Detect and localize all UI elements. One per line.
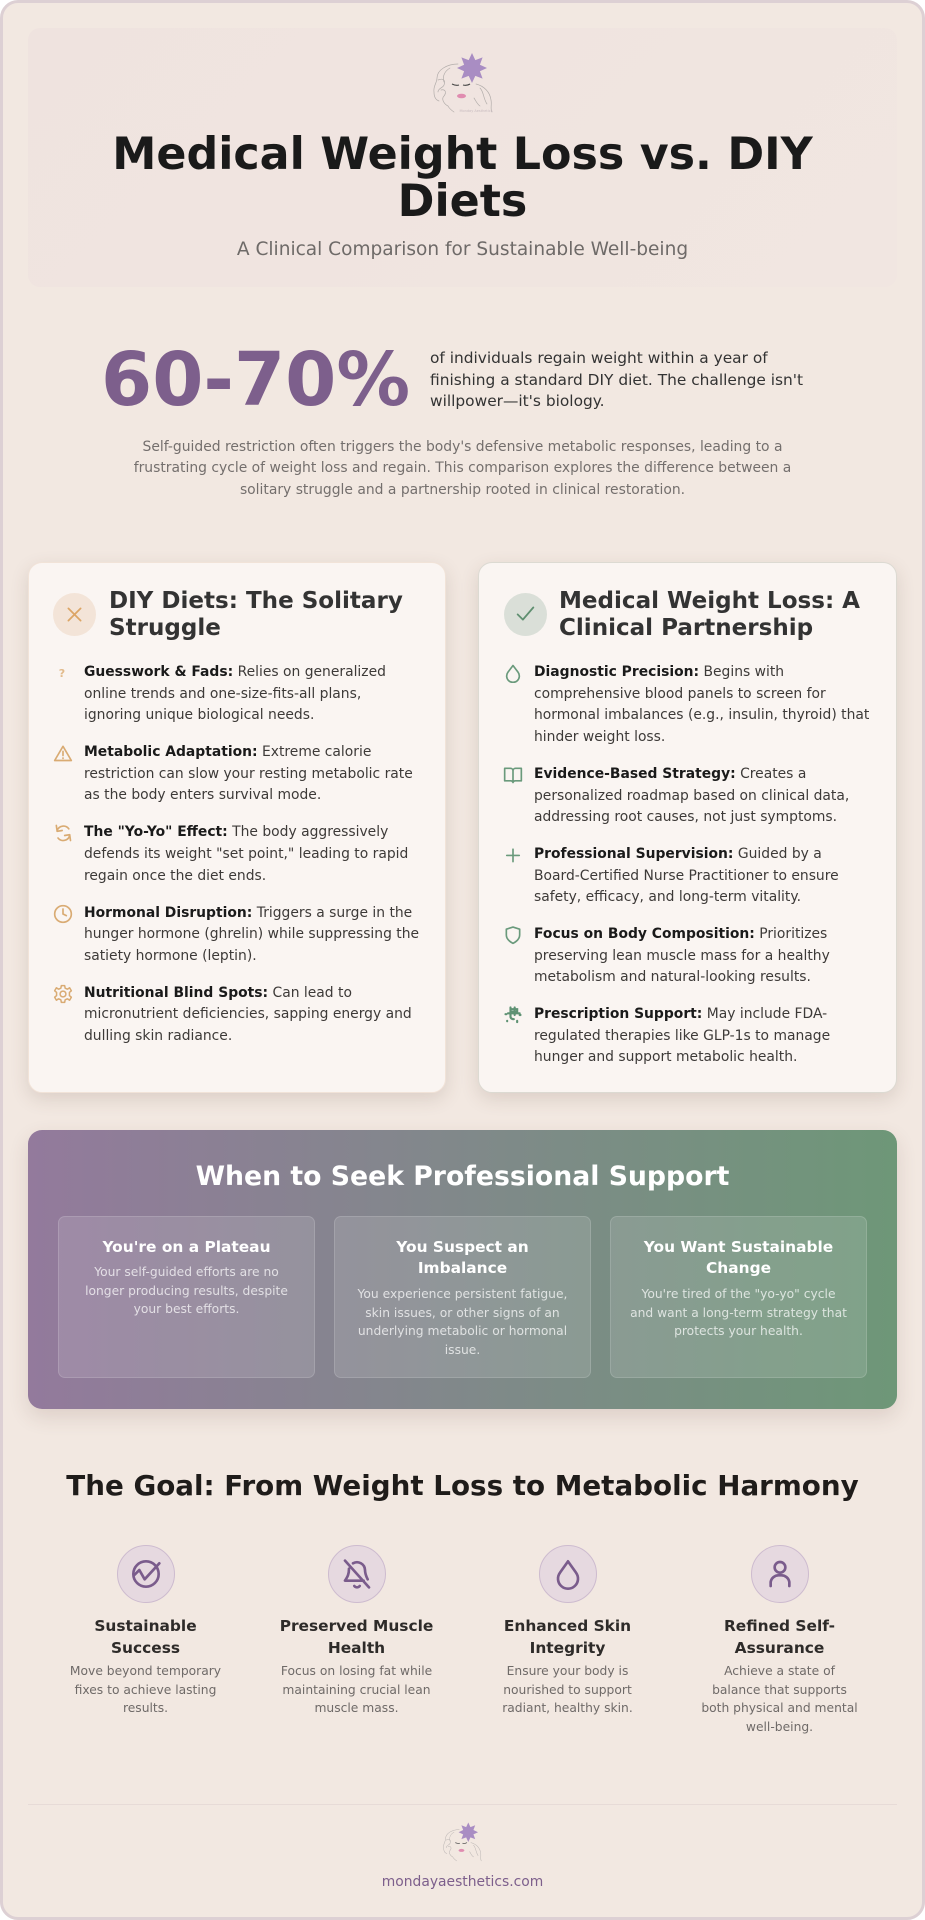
item: guesswork xyxy=(59,664,386,723)
goal: refined self-assurance: Assurance xyxy=(735,1639,824,1657)
item: body composition: Focus on Body Composition: Prioritizes xyxy=(534,926,827,942)
item: yo-yo effect: The "Yo-Yo" Effect: The body aggressively xyxy=(84,824,388,840)
goal: refined self-assurance: Refined Self- xyxy=(724,1617,835,1635)
item: guesswork: Guesswork & Fads: Relies on generalized xyxy=(84,664,386,680)
intro paragraph: solitary struggle and a partnership rooted in clinical restoration. xyxy=(240,482,685,498)
item: guesswork: ? xyxy=(59,667,65,680)
card: plateau: You're on a Plateau xyxy=(102,1238,271,1256)
card: plateau: your best efforts. xyxy=(134,1302,239,1316)
item: evidence-based strategy: personalized roadmap based on clinical data, xyxy=(534,788,849,804)
text: results. xyxy=(123,1701,168,1715)
item: yo-yo effect: regain once the diet ends. xyxy=(84,868,266,884)
item: metabolic adaptation: restriction can slow your resting metabolic rate xyxy=(84,766,413,782)
item: hormonal disruption: hunger hormone (ghrelin) while suppressing the xyxy=(84,926,419,942)
intro paragraph: frustrating cycle of weight loss and regain. This comparison explores the difference between a xyxy=(134,460,791,476)
item: metabolic adaptation: Metabolic Adaptation: Extreme calorie xyxy=(84,744,371,760)
text: both physical and mental xyxy=(701,1701,858,1715)
header panel xyxy=(28,28,897,287)
heading xyxy=(559,588,860,641)
item: hormonal disruption: Hormonal Disruption: Triggers a surge in the xyxy=(84,905,412,921)
card: imbalance: skin issues, or other signs of an xyxy=(365,1306,560,1320)
goal: enhanced skin integrity: Integrity xyxy=(530,1639,605,1657)
stat description: willpower—it's biology. xyxy=(430,392,605,410)
footer logo xyxy=(443,1822,482,1861)
item: prescription support: hunger and support metabolic health. xyxy=(534,1049,797,1065)
item: body composition: metabolism and natural-looking results. xyxy=(534,969,811,985)
item: professional supervision: Professional Supervision: Guided by a xyxy=(534,846,822,862)
icon: bell off xyxy=(328,1545,386,1603)
card: sustainable change: You Want Sustainable xyxy=(644,1238,833,1256)
goal: preserved muscle health xyxy=(280,1545,433,1715)
panel: when to seek professional support xyxy=(28,1130,897,1409)
icon: droplet xyxy=(538,1545,596,1603)
goal: enhanced skin integrity xyxy=(502,1545,633,1715)
icon: chart in circle xyxy=(116,1545,174,1603)
subtitle: A Clinical Comparison for Sustainable Well-being xyxy=(237,239,688,260)
logo: Monday Aesthetics xyxy=(459,109,493,113)
card: plateau: Your self-guided efforts are no xyxy=(94,1265,279,1279)
item: yo-yo effect: defends its weight "set point," leading to rapid xyxy=(84,846,408,862)
goal: refined self-assurance xyxy=(701,1545,858,1734)
item: professional supervision: Board-Certified Nurse Practitioner to ensure xyxy=(534,868,839,884)
item: metabolic adaptation: as the body enters survival mode. xyxy=(84,787,321,803)
goal: refined self-assurance: balance that supports xyxy=(712,1682,847,1696)
item: prescription support xyxy=(504,1006,830,1065)
card: sustainable change xyxy=(610,1216,867,1378)
item: nutritional blind spots: Nutritional Blind Spots: Can lead to xyxy=(84,985,352,1001)
card: sustainable change: Change xyxy=(706,1259,771,1277)
goal: sustainable success: Sustainable xyxy=(94,1617,197,1635)
intro paragraph: Self-guided restriction often triggers the body's defensive metabolic responses, leading to a xyxy=(143,438,782,454)
title: Diets xyxy=(398,176,527,227)
item: evidence-based strategy: addressing root causes, not just symptoms. xyxy=(534,809,837,825)
card: imbalance: underlying metabolic or hormonal xyxy=(358,1324,567,1338)
item: diagnostic precision: hormonal imbalances (e.g., insulin, thyroid) that xyxy=(534,707,869,723)
goal: sustainable success: Move beyond temporary xyxy=(70,1664,221,1678)
goal: sustainable success: Success xyxy=(111,1639,180,1657)
item: prescription support: regulated therapies like GLP-1s to manage xyxy=(534,1028,830,1044)
item: metabolic adaptation xyxy=(54,744,413,803)
text: radiant, healthy skin. xyxy=(502,1701,633,1715)
stat description xyxy=(430,349,803,410)
stat description: of individuals regain weight within a year of xyxy=(430,349,768,367)
text: well-being. xyxy=(746,1720,813,1734)
section heading: When to Seek Professional Support xyxy=(196,1161,729,1192)
goal: enhanced skin integrity: Ensure your body is xyxy=(507,1664,628,1678)
item: professional supervision xyxy=(506,846,839,905)
heading: Clinical Partnership xyxy=(559,615,813,641)
item: hormonal disruption: satiety hormone (leptin). xyxy=(84,948,257,964)
item: evidence-based strategy: Evidence-Based Strategy: Creates a xyxy=(534,766,806,782)
card: imbalance: You Suspect an xyxy=(396,1238,529,1256)
footer url: mondayaesthetics.com xyxy=(382,1874,543,1890)
card: plateau xyxy=(58,1216,315,1378)
title xyxy=(112,129,814,227)
item: guesswork: online trends and one-size-fits-all plans, xyxy=(84,686,361,702)
heading: Struggle xyxy=(109,615,221,641)
heading xyxy=(109,588,403,641)
goal heading: The Goal: From Weight Loss to Metabolic Harmony xyxy=(66,1469,859,1502)
item: body composition xyxy=(506,926,830,985)
item: diagnostic precision xyxy=(506,664,869,745)
text: fixes to achieve lasting xyxy=(75,1682,216,1696)
item: prescription support: Prescription Support: May include FDA- xyxy=(534,1006,827,1022)
panel: medical weight loss xyxy=(478,562,897,1093)
text: nourished to support xyxy=(503,1682,632,1696)
card: imbalance: You experience persistent fatigue, xyxy=(358,1287,567,1301)
item: professional supervision: safety, efficacy, and long-term vitality. xyxy=(534,889,801,905)
text: maintaining crucial lean xyxy=(282,1682,431,1696)
card: imbalance: Imbalance xyxy=(418,1259,507,1277)
card: plateau: longer producing results, despite xyxy=(85,1284,288,1298)
item: nutritional blind spots: dulling skin radiance. xyxy=(84,1028,232,1044)
goal: preserved muscle health: Preserved Muscle xyxy=(280,1617,433,1635)
card: sustainable change: and want a long-term strategy that xyxy=(630,1306,847,1320)
text: muscle mass. xyxy=(314,1701,399,1715)
card: sustainable change: You're tired of the "yo-yo" cycle xyxy=(641,1287,836,1301)
icon: person xyxy=(750,1545,808,1603)
intro paragraph xyxy=(134,438,791,498)
goal: refined self-assurance: Achieve a state of xyxy=(724,1664,835,1678)
item: evidence-based strategy xyxy=(504,766,849,825)
item: diagnostic precision: hinder weight loss. xyxy=(534,729,665,745)
logo xyxy=(434,53,493,113)
title: Medical Weight Loss vs. DIY xyxy=(112,129,813,180)
goal: sustainable success xyxy=(70,1545,221,1715)
goal: enhanced skin integrity: Enhanced Skin xyxy=(504,1617,631,1635)
big number: 60-70% xyxy=(101,338,410,423)
card: imbalance xyxy=(334,1216,591,1378)
goal: preserved muscle health: Focus on losing fat while xyxy=(281,1664,432,1678)
icon: check in circle xyxy=(504,593,547,636)
item: diagnostic precision: Diagnostic Precision: Begins with xyxy=(534,664,784,680)
heading: DIY Diets: The Solitary xyxy=(109,588,403,614)
panel: DIY diets xyxy=(28,562,446,1093)
item: diagnostic precision: comprehensive blood panels to screen for xyxy=(534,686,826,702)
item: hormonal disruption xyxy=(54,904,419,964)
item: yo-yo effect xyxy=(56,824,408,884)
item: nutritional blind spots: micronutrient deficiencies, sapping energy and xyxy=(84,1006,412,1022)
item: nutritional blind spots xyxy=(54,984,412,1044)
card: imbalance: issue. xyxy=(445,1342,480,1356)
item: guesswork: ignoring unique biological needs. xyxy=(84,707,314,723)
statistic block xyxy=(101,338,803,498)
icon: x in circle xyxy=(53,593,96,636)
item: body composition: preserving lean muscle mass for a healthy xyxy=(534,948,830,964)
goal: preserved muscle health: Health xyxy=(328,1639,385,1657)
heading: Medical Weight Loss: A xyxy=(559,588,860,614)
stat description: finishing a standard DIY diet. The challenge isn't xyxy=(430,371,803,389)
card: sustainable change: protects your health. xyxy=(674,1324,803,1338)
